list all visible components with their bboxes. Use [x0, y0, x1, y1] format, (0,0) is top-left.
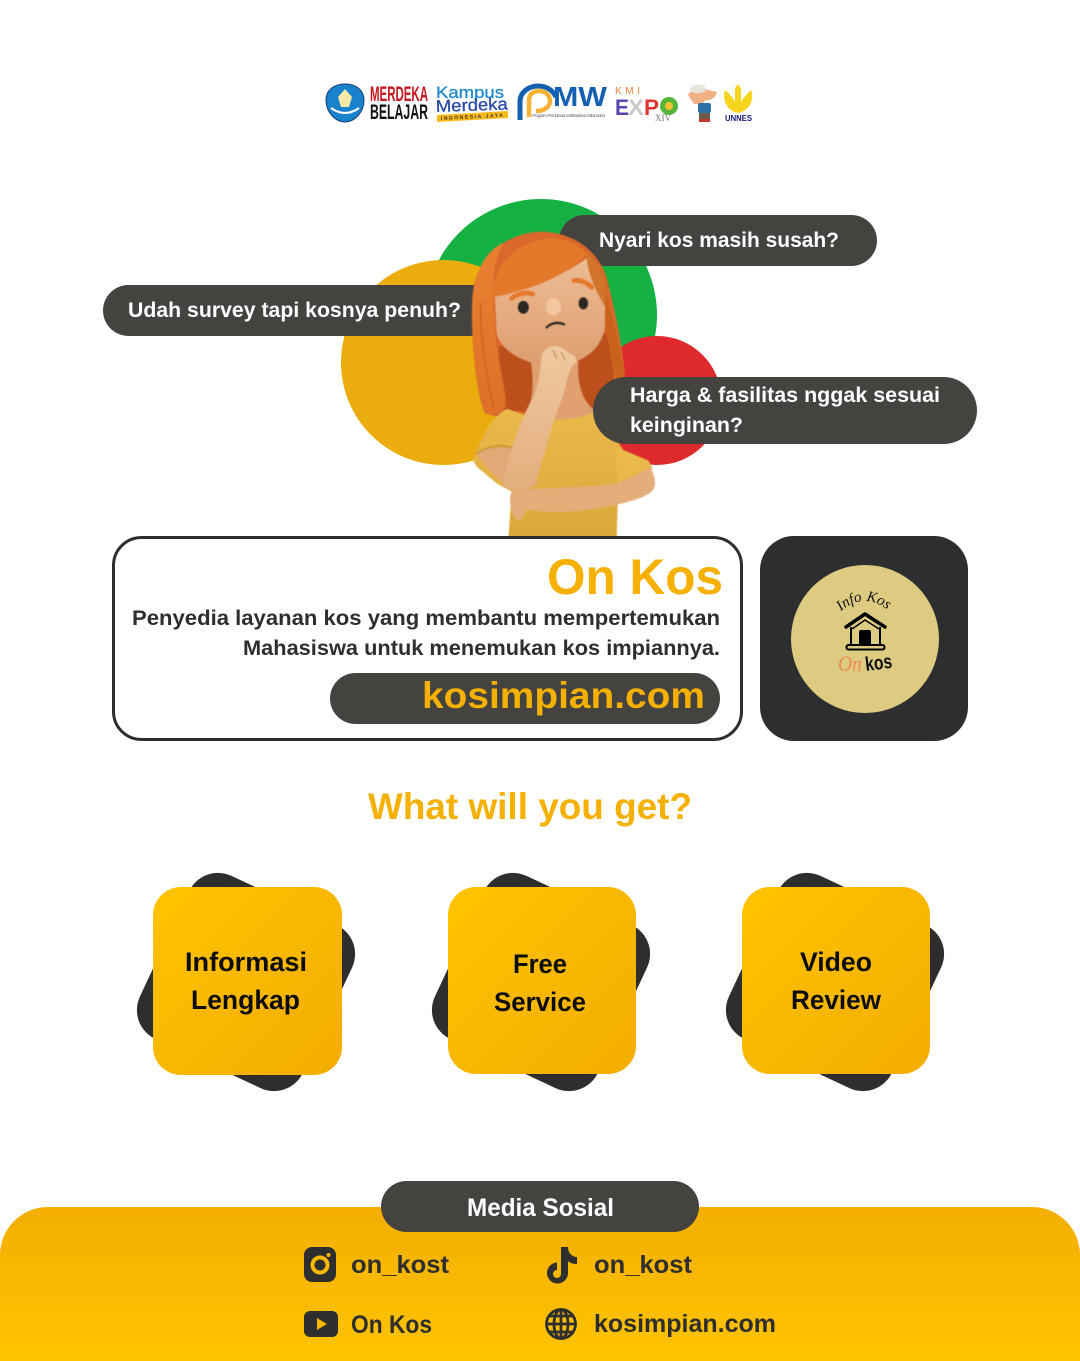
- logo: KMI Expo: KMI: [615, 86, 640, 97]
- right sleeve: [616, 447, 653, 483]
- fringe: [493, 239, 587, 297]
- heading pill: Media Sosial: Media Sosial: [467, 1194, 614, 1222]
- right hair strand: [605, 290, 624, 383]
- description line 1: Penyedia layanan kos yang membantu mempertemukan: [132, 606, 720, 630]
- neck: [527, 357, 597, 420]
- logo: KMI Expo: [615, 86, 678, 123]
- url pill: [330, 673, 720, 724]
- eyes: [518, 301, 529, 314]
- upper left arm: [477, 447, 538, 491]
- icon: globe: [546, 1310, 576, 1338]
- speech bubble: Harga dan fasilitas: Harga & fasilitas nggak sesuai: [630, 383, 940, 407]
- logo: PMW: [520, 81, 608, 120]
- left hair strand: [472, 243, 506, 414]
- panel: On Kos description: [114, 538, 742, 740]
- speech bubble: Harga dan fasilitas: keinginan?: [630, 413, 743, 437]
- social: TikTok: on_kost: [594, 1251, 693, 1279]
- social: Instagram: [304, 1247, 450, 1282]
- logo: PMW: Program Pembinaan Mahasiswa Wirausaha: [532, 113, 605, 118]
- card: Free Service: Free: [513, 949, 567, 979]
- card: Video Review: [715, 862, 955, 1102]
- eyebrows: [512, 293, 533, 299]
- mouth: [547, 323, 564, 327]
- logo: PMW: MW: [553, 81, 608, 112]
- character: thinking girl: [472, 232, 655, 538]
- label: On: On: [838, 651, 862, 676]
- logo: KMI Expo: P: [644, 95, 659, 120]
- circle: yellow: [341, 260, 546, 465]
- logo: mascot: [688, 84, 717, 122]
- curved label: Info Kos: [836, 591, 891, 612]
- shirt: [474, 409, 653, 538]
- heading pill: Media Sosial: [381, 1181, 699, 1232]
- icon: tiktok: [547, 1247, 577, 1283]
- social: YouTube: [304, 1311, 432, 1339]
- url text: kosimpian.com: [422, 675, 705, 716]
- raised arm and hand: [503, 346, 576, 490]
- lower arm: [510, 467, 655, 520]
- social: website: kosimpian.com: [594, 1310, 776, 1338]
- speech bubble: Harga dan fasilitas: [593, 377, 977, 444]
- icon: youtube: [304, 1311, 338, 1337]
- description line 2: Mahasiswa untuk menemukan kos impiannya.: [243, 636, 720, 660]
- icon: house: [846, 614, 885, 650]
- logo: Kampus Merdeka: Merdeka: [435, 94, 509, 116]
- logo: Merdeka Belajar: BELAJAR: [370, 101, 428, 124]
- social: TikTok: [547, 1247, 693, 1283]
- logo: KMI Expo: X: [628, 95, 644, 120]
- card: Free Service: [421, 862, 661, 1102]
- face: [495, 258, 606, 366]
- label: kos: kos: [864, 651, 893, 676]
- nose: [546, 298, 561, 315]
- logo: Kampus Merdeka: [435, 83, 509, 122]
- logo: Tut Wuri Handayani: [326, 84, 364, 122]
- speech bubble: Nyari kos: Nyari kos masih susah?: [599, 228, 839, 252]
- card: Free Service: Service: [494, 987, 586, 1017]
- panel: footer band: [0, 1207, 1080, 1361]
- heading: On Kos: On Kos: [547, 549, 723, 605]
- circle: red: [592, 336, 722, 465]
- left sleeve hem: [476, 446, 513, 454]
- social: YouTube: On Kos: [351, 1311, 432, 1339]
- speech bubble: Nyari kos: [559, 215, 877, 266]
- panel: logo badge: [760, 536, 968, 741]
- hair back: [472, 232, 625, 417]
- circle: green: [425, 199, 657, 431]
- logo: Merdeka Belajar: MERDEKA: [370, 83, 428, 106]
- card: Informasi Lengkap: Informasi: [185, 947, 307, 977]
- heading: What will you get: What will you get?: [368, 786, 692, 827]
- speech bubble: Udah survey: [103, 285, 503, 336]
- speech bubble: Udah survey: Udah survey tapi kosnya penuh?: [128, 298, 461, 322]
- card: Video Review: Video: [800, 947, 872, 977]
- card: Informasi Lengkap: [126, 862, 366, 1102]
- icon: instagram: [304, 1247, 336, 1282]
- logo row: [326, 81, 753, 124]
- logo: UNNES: [724, 84, 753, 123]
- logo: KMI Expo: E: [615, 95, 629, 120]
- logo: Merdeka Belajar: [370, 83, 428, 124]
- logo: Kampus Merdeka: INDONESIA JAYA: [441, 113, 503, 122]
- card: Informasi Lengkap: Lengkap: [191, 985, 300, 1015]
- logo: UNNES: UNNES: [725, 114, 753, 123]
- logo: KMI Expo: XIV: [655, 113, 672, 123]
- social: Instagram: on_kost: [351, 1251, 450, 1279]
- logo: Kampus Merdeka: Kampus: [436, 83, 504, 102]
- card: Video Review: Review: [791, 985, 882, 1015]
